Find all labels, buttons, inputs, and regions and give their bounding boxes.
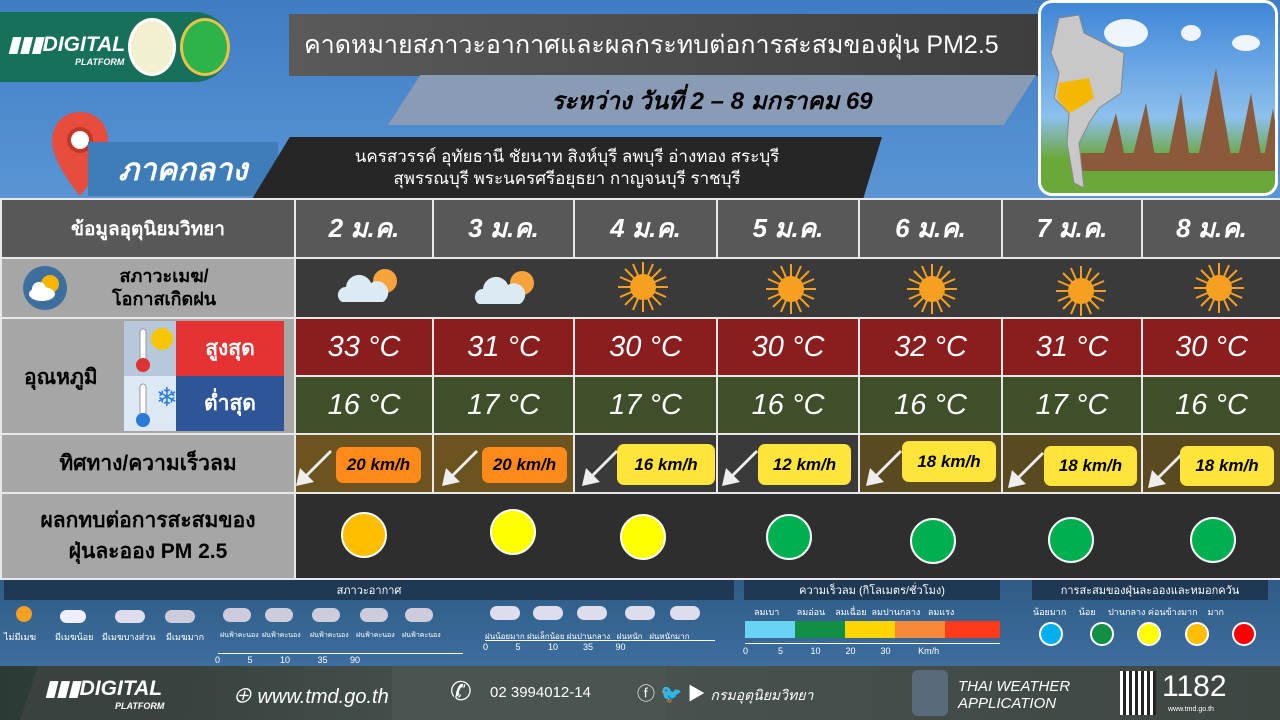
min label <box>176 376 284 431</box>
min temps: 16 °C <box>1175 388 1248 420</box>
wind speed boxes <box>336 441 1274 486</box>
max temps: 31 °C <box>467 330 540 362</box>
footer bar: 02 3994012-14 <box>490 684 591 701</box>
text: 18 km/h <box>1059 456 1122 475</box>
logo: TMD <box>180 18 230 76</box>
max temps: 30 °C <box>752 330 824 362</box>
footer: QR and 1182 <box>1120 671 1156 715</box>
text: 6 ม.ค. <box>895 213 966 243</box>
provinces: สุพรรณบุรี พระนครศรีอยุธยา กาญจนบุรี ราชบุรี <box>393 169 741 188</box>
legend: PM accumulation: น้อยมาก น้อย ปานกลาง ค่อนข้างมาก มาก <box>1033 607 1224 617</box>
min temps: 16 °C <box>752 388 824 420</box>
legend: weather header <box>4 580 734 600</box>
legend strip: 0 5 10 35 90 <box>483 642 626 652</box>
text: 3 ม.ค. <box>468 213 539 243</box>
min label: ต่ำสุด <box>204 392 256 415</box>
legend strip <box>0 580 1280 666</box>
max temps: 30 °C <box>1175 330 1248 362</box>
icon: partly cloudy day 3 <box>474 271 534 304</box>
footer bar: ✆ <box>450 676 472 706</box>
icon: cold thermometer <box>124 376 176 431</box>
wind arrows NE <box>296 450 1180 488</box>
min temps <box>296 377 1280 433</box>
footer: thai weather app <box>912 670 948 716</box>
legend: weather icons: มีเมฆบางส่วน <box>102 632 155 642</box>
text: 7 ม.ค. <box>1037 213 1107 243</box>
pm dots <box>341 509 1236 564</box>
icons: sun days 4-8 <box>618 262 1244 316</box>
legend: wind speed: 0 5 10 20 30 Km/h <box>743 646 939 656</box>
legend: PM accumulation: การสะสมของฝุ่นละอองและหมอกควัน <box>1061 585 1239 597</box>
pm row background <box>296 494 1280 578</box>
row label: PM2.5 <box>2 494 294 578</box>
legend: weather icons: ไม่มีเมฆ <box>4 632 36 642</box>
text: 16 km/h <box>634 454 698 474</box>
min temps: 17 °C <box>467 388 540 420</box>
row label: cloud: โอกาสเกิดฝน <box>112 289 216 309</box>
icon: partly cloudy day 2 <box>338 269 397 302</box>
row label: wind: ทิศทาง/ความเร็วลม <box>59 452 237 475</box>
photo with map <box>1038 0 1278 196</box>
footer bar: APPLICATION <box>958 695 1056 712</box>
legend: weather icons: ฝนฟ้าคะนอง <box>262 632 301 639</box>
min temps: 16 °C <box>894 388 967 420</box>
header row label: ข้อมูลอุตุนิยมวิทยา <box>71 218 225 240</box>
day headers <box>296 200 432 257</box>
icon: cloud sun <box>23 266 67 310</box>
text: 5 ม.ค. <box>753 213 823 243</box>
legend: rain icons: ฝนน้อยมาก ฝนเล็กน้อย ฝนปานกลาง ฝนหนัก ฝนหนักมาก <box>485 632 690 641</box>
max temps: 31 °C <box>1036 330 1108 362</box>
wind row <box>296 435 1280 492</box>
title bar: คาดหมายสภาวะอากาศและผลกระทบต่อการสะสมของฝุ่น PM2.5 <box>304 31 999 59</box>
footer bar: ▮▮▮DIGITAL <box>45 677 162 700</box>
legend: weather icons: ฝนฟ้าคะนอง <box>402 632 441 639</box>
min temps: 17 °C <box>1036 388 1108 420</box>
provinces <box>252 137 882 199</box>
icon: location pin <box>52 112 108 196</box>
table background <box>0 198 1280 580</box>
legend: wind speed <box>743 580 1000 656</box>
provinces: นครสวรรค์ อุทัยธานี ชัยนาท สิงห์บุรี ลพบุรี อ่างทอง สระบุรี <box>355 147 779 166</box>
row label: temperature <box>2 319 294 433</box>
legend: weather icons: ฝนฟ้าคะนอง <box>220 632 259 639</box>
legend: wind speed: ความเร็วลม (กิโลเมตร/ชั่วโมง) <box>799 585 945 597</box>
min temps: 16 °C <box>328 388 400 420</box>
footer: phone <box>392 666 667 720</box>
logo: ministry <box>128 18 176 76</box>
max temps: 33 °C <box>328 330 400 362</box>
row label: PM2.5: ฝุ่นละออง PM 2.5 <box>69 540 227 563</box>
row label: PM2.5: ผลกทบต่อการสะสมของ <box>40 509 256 532</box>
cloud row cells <box>296 259 1280 317</box>
text: 12 km/h <box>773 454 836 474</box>
legend: weather icons: ฝนฟ้าคะนอง <box>356 632 395 639</box>
footer bar: www.tmd.go.th <box>1168 706 1214 713</box>
header row label <box>2 200 294 257</box>
region name: ภาคกลาง <box>119 152 247 187</box>
date bar: ระหว่าง วันที่ 2 – 8 มกราคม 69 <box>551 88 873 114</box>
row label: cloud: สภาวะเมฆ/ <box>119 266 209 286</box>
text: 8 ม.ค. <box>1176 213 1247 243</box>
legend: rain icons <box>485 606 700 641</box>
text: 18 km/h <box>1195 456 1259 475</box>
footer: website: ⊕ www.tmd.go.th <box>232 686 389 708</box>
header background <box>0 0 1280 200</box>
legend: weather icons: มีเมฆมาก <box>166 632 204 642</box>
legend: thunder scale <box>218 653 463 654</box>
icon: hot thermometer <box>124 321 176 376</box>
row label: temperature: อุณหภูมิ <box>24 366 98 389</box>
legend: weather header: สภาวะอากาศ <box>337 585 401 597</box>
max temps: 30 °C <box>609 330 682 362</box>
legend: weather icons: มีเมฆน้อย <box>55 632 93 642</box>
logo bar: digital platform: PLATFORM <box>75 57 124 67</box>
legend: weather icons: ฝนฟ้าคะนอง <box>310 632 349 639</box>
title bar <box>289 14 1039 76</box>
text: 4 ม.ค. <box>610 213 681 243</box>
footer: social: ⓕ 🐦 ▶ กรมอุตุนิยมวิทยา <box>637 684 813 704</box>
digital platform text: ▮▮▮DIGITAL <box>8 33 125 56</box>
footer bar: THAI WEATHER <box>958 678 1070 695</box>
max temps <box>296 319 1280 375</box>
max label: สูงสุด <box>205 337 255 360</box>
footer: digital platform logo <box>20 666 100 720</box>
legend: wind speed: ลมเบา ลมอ่อน ลมเฉื่อย ลมปานกลาง ลมแรง <box>754 607 954 617</box>
map of thailand <box>1050 14 1124 189</box>
text: 20 km/h <box>493 455 556 474</box>
row label: wind <box>2 435 294 492</box>
legend: weather icons <box>3 606 441 642</box>
logo bar: digital platform <box>0 12 230 82</box>
footer bar: 1182 <box>1162 670 1227 703</box>
text: 18 km/h <box>917 452 981 470</box>
max temps: 32 °C <box>894 330 967 362</box>
region name <box>88 142 278 196</box>
temples <box>1081 19 1275 171</box>
legend: PM accumulation <box>1032 580 1268 646</box>
min temps: 17 °C <box>609 388 682 420</box>
date bar <box>388 75 1036 125</box>
max label <box>176 321 284 376</box>
text: 20 km/h <box>347 455 410 474</box>
day headers: 2 ม.ค. <box>329 213 399 243</box>
legend strip: 0 5 10 35 90 <box>215 655 360 665</box>
footer bar: PLATFORM <box>115 701 164 711</box>
footer bar <box>0 666 1280 720</box>
row label: cloud <box>2 259 294 317</box>
